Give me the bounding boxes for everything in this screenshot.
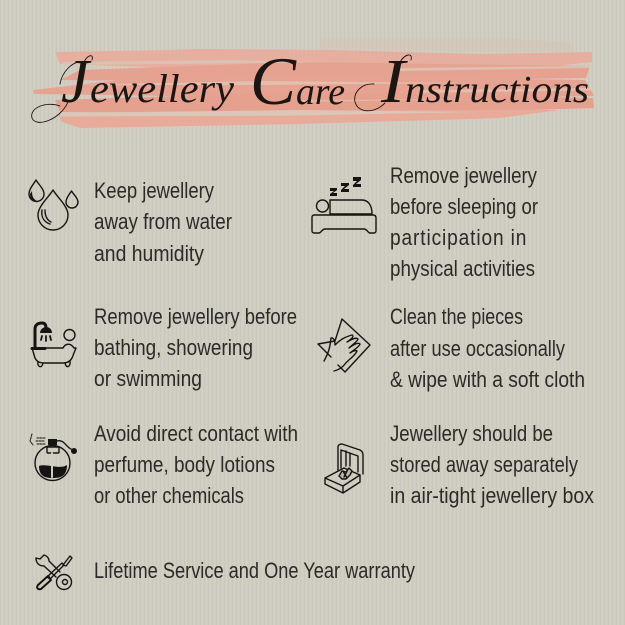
- text: avoid chemicals: Avoid direct contact with: [94, 421, 298, 446]
- text: avoid chemicals: perfume, body lotions: [94, 452, 275, 477]
- text: store separately: stored away separately: [390, 452, 578, 477]
- text: clean the pieces: & wipe with a soft cloth: [390, 367, 585, 392]
- icon: ring box: [325, 444, 363, 493]
- text: remove before bathing: bathing, showering: [94, 335, 253, 360]
- text: remove before sleeping: Remove jewellery: [390, 163, 537, 188]
- text: store separately: in air-tight jewellery box: [390, 483, 594, 508]
- text: remove before sleeping: physical activities: [390, 256, 535, 281]
- text: remove before sleeping: [390, 163, 538, 281]
- icon: sleeping in bed: [312, 177, 376, 233]
- text: keep away from water: and humidity: [94, 241, 204, 266]
- title: are: [296, 71, 345, 113]
- icon: bathtub with shower: [32, 323, 76, 367]
- icon: perfume bottle: [30, 434, 77, 480]
- item: clean the pieces: [318, 304, 585, 392]
- title: [32, 43, 589, 122]
- text: remove before bathing: or swimming: [94, 366, 202, 391]
- title: C: [250, 43, 297, 119]
- text: keep away from water: Keep jewellery: [94, 178, 214, 203]
- item: remove before sleeping: [312, 163, 538, 281]
- title: nstructions: [405, 69, 589, 111]
- icon: water drops: [29, 180, 78, 230]
- text: store separately: Jewellery should be: [390, 421, 553, 446]
- title: ewellery: [90, 66, 234, 111]
- item: keep away from water: [29, 178, 232, 266]
- text: avoid chemicals: or other chemicals: [94, 483, 244, 508]
- item: store separately: [325, 421, 594, 508]
- icon: wrench and screwdriver: [36, 555, 72, 590]
- text: clean the pieces: after use occasionally: [390, 336, 565, 361]
- item: avoid chemicals: [30, 421, 298, 508]
- brush stroke behind title: [33, 38, 594, 128]
- text: lifetime service: Lifetime Service and One Year warranty: [94, 558, 415, 583]
- title: I: [380, 48, 409, 116]
- item: lifetime service: [36, 555, 415, 590]
- text: remove before bathing: Remove jewellery before: [94, 304, 297, 329]
- text: remove before sleeping: participation in: [390, 226, 527, 250]
- title: J: [61, 48, 92, 116]
- text: keep away from water: away from water: [94, 209, 232, 234]
- text: clean the pieces: Clean the pieces: [390, 304, 523, 329]
- text: remove before sleeping: before sleeping or: [390, 194, 538, 219]
- icon: hand wiping with cloth: [318, 319, 370, 372]
- item: remove before bathing: [32, 304, 297, 391]
